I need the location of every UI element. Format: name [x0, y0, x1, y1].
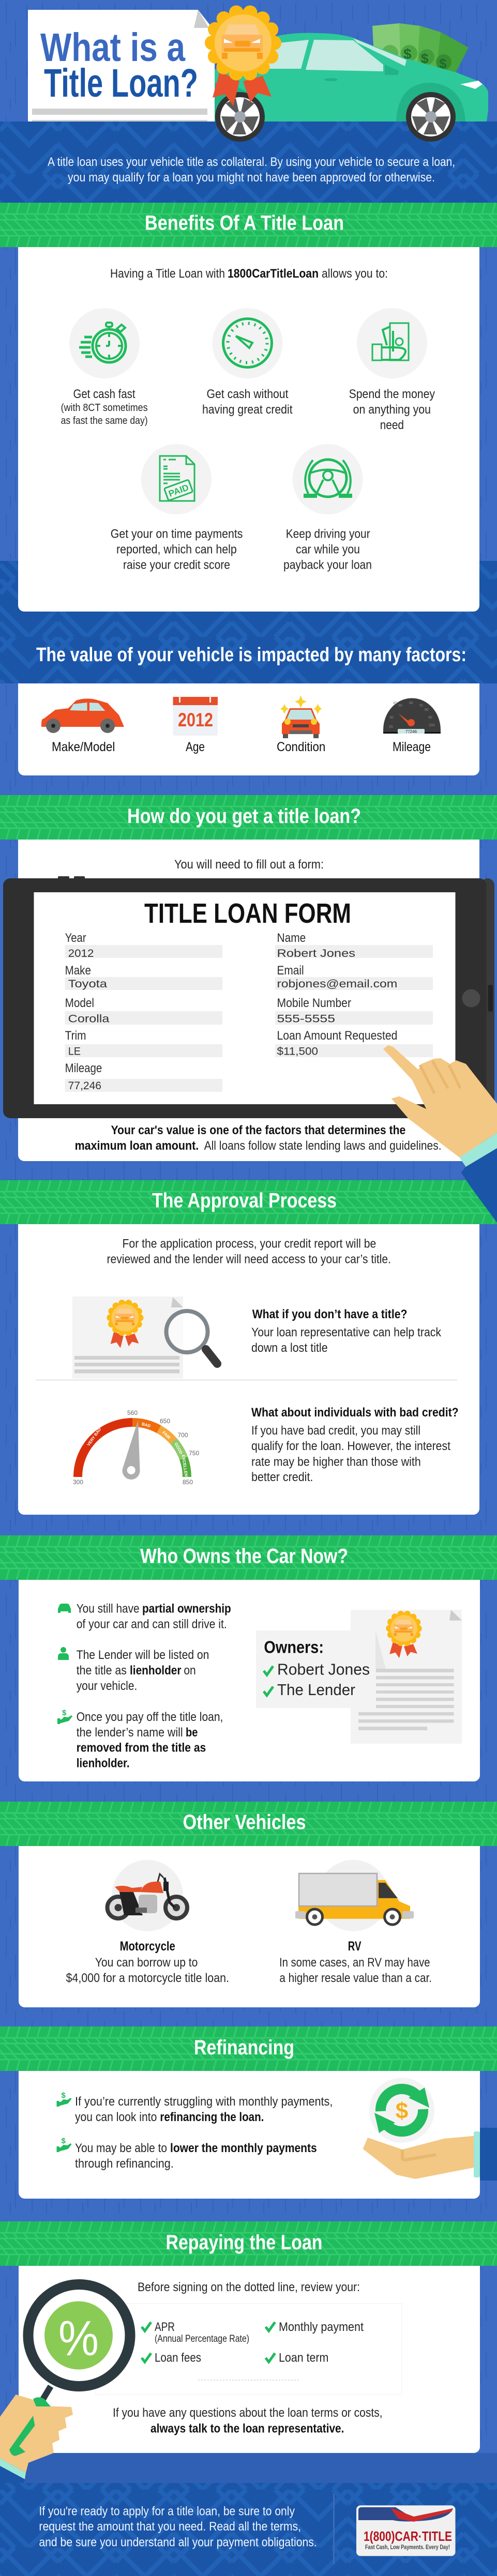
heading band: other vehicles [0, 1802, 497, 1846]
closing text [39, 2504, 317, 2550]
hero: seal with ribbon [212, 12, 274, 106]
icon: odometer: 60 [409, 702, 413, 705]
icon: stopwatch [79, 323, 126, 362]
credit gauge [73, 1409, 199, 1486]
questions text: always talk to the loan representative. [150, 2422, 344, 2436]
form: right column: robjones@email.com [277, 978, 397, 990]
title document with owners: Owners: [264, 1638, 324, 1657]
heading band: approval: The Approval Process [152, 1190, 337, 1212]
text: bad credit: What about individuals with bad credit? [251, 1406, 459, 1420]
closing text: request the amount that you need. Read all the terms, [39, 2520, 301, 2534]
hero: money stack: $ [421, 51, 429, 66]
benefit: no great credit: having great credit [202, 403, 293, 417]
icon: hand with dollar [57, 2137, 71, 2152]
factor: mileage [383, 698, 441, 754]
credit gauge: VERY BAD [86, 1427, 102, 1447]
checklist: Loan fees [155, 2351, 201, 2365]
contract box [96, 2304, 402, 2395]
intro text: you may qualify for a loan you might not have been approved for otherwise. [68, 171, 435, 185]
hand pointing at tablet [383, 1045, 497, 1223]
approval intro text: reviewed and the lender will need access to your car’s title. [107, 1252, 391, 1267]
benefit: payments reported [111, 444, 243, 572]
vehicle: RV: In some cases, an RV may have [279, 1956, 430, 1970]
heading band: refinancing [0, 2026, 497, 2071]
intro text [48, 155, 455, 185]
icon: odometer [383, 698, 441, 734]
ownership bullet: lienholder [58, 1647, 209, 1693]
text: no title: down a lost title [251, 1341, 328, 1355]
tablet [3, 876, 494, 1118]
icon: calendar: 2012 [178, 709, 213, 730]
icon: odometer: 30 [389, 716, 394, 720]
title [40, 25, 198, 105]
icon: odometer: 80 [425, 708, 429, 712]
icon: steering wheel [304, 460, 352, 498]
refinancing bullet 2 [57, 2137, 317, 2171]
benefits intro text [110, 267, 388, 281]
factor: condition [277, 695, 325, 754]
benefit: keep driving: payback your loan [283, 558, 372, 572]
benefit: no great credit: Get cash without [207, 387, 289, 401]
text: bad credit: qualify for the loan. However, the interest [251, 1439, 450, 1453]
refinance icon with hand: $ [396, 2098, 408, 2124]
icon: odometer: 90 [428, 716, 432, 720]
icon: odometer: 100 [429, 724, 435, 727]
benefit: spend money [349, 308, 435, 432]
benefit: get cash fast: (with 8CT sometimes [61, 402, 148, 414]
hero: money stack: $ [403, 46, 412, 62]
refinancing bullet 1 [57, 2091, 333, 2124]
vehicle: motorcycle [66, 1860, 229, 1985]
form: right column: Loan Amount Requested [277, 1029, 397, 1043]
checklist: Loan term [279, 2351, 328, 2365]
icon: hand with dollar [57, 2091, 71, 2107]
icon: odometer: 50 [398, 704, 402, 708]
hero: title document [28, 10, 215, 121]
hero: money stack: $ [439, 56, 447, 71]
closing text: and be sure you understand all your payment obligations. [39, 2535, 317, 2550]
heading band: benefits [0, 203, 497, 247]
heading band: owner: Who Owns the Car Now? [140, 1545, 348, 1568]
heading band: other vehicles: Other Vehicles [183, 1811, 306, 1834]
heading band: benefits: Benefits Of A Title Loan [145, 212, 344, 235]
credit gauge: FAIR [161, 1430, 172, 1440]
ownership bullet: removed: be [186, 1726, 198, 1740]
credit gauge: 750 [189, 1450, 199, 1457]
form intro text: You will need to fill out a form: [174, 858, 324, 872]
hero: green car [214, 33, 488, 121]
benefit: keep driving: Keep driving your [286, 527, 370, 541]
heading band: repaying: Repaying the Loan [165, 2231, 323, 2254]
form: left column: Trim [65, 1029, 86, 1043]
panel: approval card [18, 1224, 479, 1515]
checklist: APR [155, 2320, 175, 2334]
text: bad credit: rate may be higher than those with [251, 1455, 421, 1469]
benefit: spend money: on anything you [353, 403, 431, 417]
factor: make/model: Make/Model [52, 740, 115, 754]
icon: motorcycle [108, 1874, 187, 1918]
text: bad credit: If you have bad credit, you may still [251, 1424, 420, 1438]
checklist: Monthly payment [279, 2320, 364, 2334]
refinancing bullet 2: lower the monthly payments [170, 2141, 317, 2155]
vehicle: motorcycle: Motorcycle [120, 1939, 175, 1954]
factor: mileage: Mileage [393, 740, 431, 754]
closing text: If you're ready to apply for a title loan, be sure to only [39, 2504, 295, 2519]
title: Title Loan? [44, 61, 198, 105]
panel: refinancing card [19, 2071, 480, 2199]
hero: rear wheel [215, 92, 265, 142]
panel: factors card [18, 683, 479, 775]
ownership bullet: lienholder: your vehicle. [77, 1679, 137, 1693]
refinancing bullet 2: You may be able to [75, 2141, 167, 2155]
ownership bullet: removed: the lender’s name will [77, 1726, 183, 1740]
magnifier with percent and hand [0, 2284, 130, 2483]
form: left column: LE [68, 1045, 81, 1058]
benefit: get cash fast: as fast the same day) [61, 415, 148, 426]
checklist: (Annual Percentage Rate) [155, 2334, 249, 2344]
heading band: repaying [0, 2221, 497, 2266]
ownership bullet: removed: lienholder. [77, 1757, 130, 1771]
heading band: how [0, 795, 497, 840]
icon: speedometer gauge [223, 318, 272, 367]
form note text: All loans follow state lending laws and guidelines. [204, 1139, 442, 1153]
form title: TITLE LOAN FORM [144, 898, 351, 929]
approval intro text: For the application process, your credit report will be [122, 1237, 376, 1251]
form: right column: Name [277, 931, 306, 945]
panel: repaying card [19, 2266, 480, 2453]
icon: hand with dollar [57, 1709, 72, 1724]
title document with owners [256, 1610, 462, 1744]
repaying intro text: Before signing on the dotted line, review your: [138, 2280, 360, 2294]
vehicle: RV: RV [348, 1939, 362, 1954]
form: left column [65, 931, 222, 1092]
benefit: keep driving [283, 444, 372, 572]
ownership bullet: lienholder: the title as [77, 1664, 127, 1678]
form: right column: Email [277, 964, 304, 978]
approval intro text [107, 1237, 391, 1267]
form: left column: 77,246 [68, 1080, 101, 1092]
ownership bullet: lienholder: lienholder [130, 1664, 181, 1678]
form: left column: Year [65, 931, 86, 945]
form: left column: Mileage [65, 1061, 102, 1075]
refinancing bullet 1: you can look into [75, 2110, 157, 2124]
panel: form card [18, 840, 479, 1161]
title document with owners: Robert Jones [277, 1660, 370, 1679]
heading band: refinancing: Refinancing [194, 2036, 294, 2059]
icon: shiny car front [280, 695, 322, 738]
panel: benefits card [18, 247, 479, 612]
icon: odometer: 77246 [405, 729, 417, 734]
credit gauge: 300 [73, 1478, 83, 1486]
heading band: approval [0, 1180, 497, 1224]
form: right column: Robert Jones [277, 948, 355, 959]
benefit: no great credit [202, 308, 293, 417]
form: left column: Toyota [68, 978, 107, 990]
credit gauge: BAD [141, 1422, 151, 1428]
ownership bullet: partial ownership [58, 1602, 231, 1631]
form: right column: $11,500 [277, 1045, 318, 1058]
checklist [142, 2320, 364, 2365]
credit gauge: 850 [183, 1478, 193, 1486]
ownership bullet: removed: removed from the title as [77, 1741, 206, 1755]
refinance icon with hand [363, 2078, 497, 2181]
title: What is a [40, 25, 186, 70]
ownership bullet: partial ownership: You still have [77, 1602, 140, 1615]
vehicle: motorcycle: $4,000 for a motorcycle title loan. [66, 1971, 229, 1985]
icon: paid document [160, 456, 194, 501]
credit gauge: 700 [177, 1431, 188, 1439]
factor: condition: Condition [277, 740, 325, 754]
form: left column: Model [65, 996, 94, 1010]
ownership bullet: partial ownership: of your car and can still drive it. [77, 1617, 227, 1631]
form: right column [275, 931, 433, 1058]
background: road factors [0, 561, 497, 683]
hero: money stack [372, 23, 469, 78]
benefit: keep driving: car while you [296, 543, 360, 557]
vehicle: motorcycle: You can borrow up to [95, 1956, 198, 1970]
background: road header [0, 121, 497, 203]
questions text: If you have any questions about the loan terms or costs, [113, 2406, 383, 2420]
benefit: spend money: need [380, 418, 404, 432]
text: no title: Your loan representative can help track [251, 1325, 442, 1339]
panel: other vehicles card [19, 1846, 480, 2007]
form: right column: Mobile Number [277, 996, 351, 1010]
benefit: get cash fast: Get cash fast [73, 387, 135, 401]
factor: age [173, 695, 218, 754]
background: road footer [0, 2483, 497, 2576]
form: left column: 2012 [68, 948, 94, 959]
title document with owners: The Lender [277, 1681, 355, 1699]
panel: ownership card [19, 1580, 480, 1781]
hero: front wheel [406, 92, 456, 142]
footer divider [333, 2494, 335, 2565]
icon: odometer: 20 [389, 725, 393, 729]
icon: paid document: PAID [167, 482, 190, 499]
icon: person [58, 1647, 69, 1660]
heading band: owner [0, 1535, 497, 1580]
vehicle: RV: a higher resale value than a car. [279, 1971, 432, 1985]
benefit: payments reported: raise your credit score [123, 558, 230, 572]
logo: license plate: Fast Cash, Low Payments. Every Day! [365, 2543, 450, 2551]
text: no title: What if you don’t have a title? [252, 1307, 407, 1321]
ownership bullet: partial ownership: partial ownership [142, 1602, 231, 1615]
refinancing bullet 1: If you’re currently struggling with monthly payments, [75, 2095, 333, 2109]
benefits intro text: 1800CarTitleLoan [228, 267, 319, 281]
icon: car [58, 1604, 71, 1613]
benefits intro text: allows you to: [322, 267, 388, 281]
icon: hand with cash [372, 323, 409, 360]
icon: document under magnifier [72, 1297, 217, 1379]
text: no title [251, 1307, 442, 1355]
icon: yellow box truck [295, 1873, 414, 1925]
ownership bullet: lienholder: on [184, 1664, 196, 1678]
benefit: payments reported: Get your on time payments [111, 527, 243, 541]
vehicle: RV [279, 1860, 432, 1985]
text: bad credit: better credit. [251, 1470, 313, 1484]
benefit: spend money: Spend the money [349, 387, 435, 401]
credit gauge: EXCELLENT [181, 1454, 189, 1480]
form: left column: Corolla [68, 1013, 110, 1025]
icon: odometer: 70 [419, 704, 423, 708]
ownership bullet: removed: Once you pay off the title loan, [77, 1710, 223, 1724]
credit gauge: 560 [127, 1409, 138, 1416]
credit gauge: GOOD [173, 1442, 184, 1455]
logo: license plate: 1(800)CAR·TITLE [364, 2528, 452, 2544]
heading band: how: How do you get a title loan? [127, 805, 361, 828]
text: bad credit [251, 1406, 459, 1484]
icon: odometer: 40 [393, 702, 397, 705]
form note text: maximum loan amount. [75, 1139, 199, 1153]
icon: red beetle car [41, 698, 124, 733]
form: left column: Make [65, 964, 91, 978]
refinancing bullet 2: through refinancing. [75, 2157, 174, 2171]
magnifier with percent and hand: % [58, 2311, 99, 2366]
factor: age: Age [186, 740, 205, 754]
questions text [113, 2406, 383, 2436]
credit gauge: 650 [160, 1417, 170, 1425]
refinancing bullet 1: refinancing the loan. [160, 2110, 264, 2124]
benefits intro text: Having a Title Loan with [110, 267, 225, 281]
form: right column: 555-5555 [277, 1013, 335, 1025]
form note text: Your car's value is one of the factors that determines the [111, 1123, 405, 1137]
form note text [75, 1123, 442, 1153]
benefit: payments reported: reported, which can help [116, 543, 237, 557]
benefit: get cash fast [61, 308, 148, 426]
logo: license plate [356, 2505, 455, 2556]
factor: make/model [41, 698, 124, 754]
ownership bullet: removed [57, 1709, 223, 1771]
ownership bullet: lienholder: The Lender will be listed on [77, 1648, 209, 1662]
